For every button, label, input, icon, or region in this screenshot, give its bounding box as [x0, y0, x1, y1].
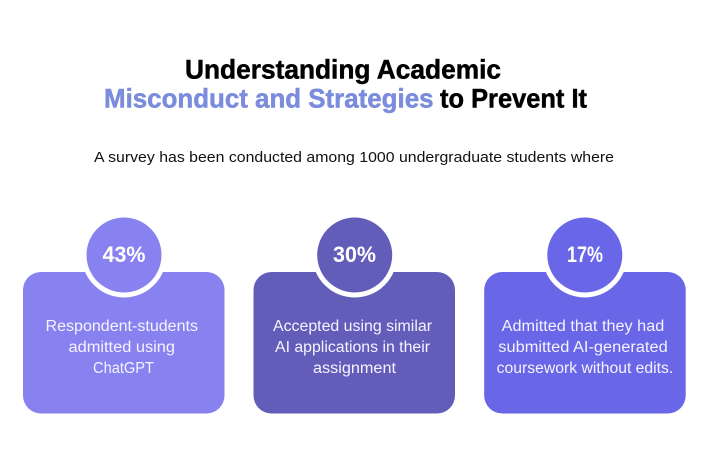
panel: 17% AI-generated coursework: [484, 212, 686, 414]
title: Misconduct and Strategies: [104, 84, 434, 114]
card background: [23, 272, 224, 414]
white ring: [542, 212, 627, 298]
card background: [484, 272, 686, 414]
panel: 43% respondent-students: [23, 212, 224, 414]
percentage value: 30%: [333, 242, 376, 267]
description: [497, 318, 673, 377]
description: Respondent-students: [46, 318, 198, 335]
description: ChatGPT: [93, 360, 154, 377]
description: admitted using: [68, 339, 175, 356]
description: coursework without edits.: [497, 360, 673, 377]
white ring: [312, 212, 397, 298]
percentage circle: [317, 218, 392, 292]
title: [104, 54, 587, 114]
white ring: [82, 212, 166, 298]
title: to Prevent It: [440, 84, 587, 114]
percentage circle: [86, 218, 162, 292]
description: [46, 318, 198, 377]
percentage value: 43%: [102, 242, 146, 267]
subtitle: A survey has been conducted among 1000 undergraduate students where: [94, 149, 614, 166]
description: [273, 318, 432, 377]
percentage value: 17%: [567, 242, 603, 267]
description: AI applications in their: [275, 339, 430, 356]
percentage circle: [547, 218, 622, 292]
description: submitted AI-generated: [498, 339, 668, 356]
description: Admitted that they had: [502, 318, 664, 335]
title: Understanding Academic: [185, 54, 501, 84]
description: assignment: [313, 360, 397, 377]
description: Accepted using similar: [273, 318, 432, 335]
card background: [254, 272, 455, 414]
panel: 30% similar AI applications: [254, 212, 455, 414]
